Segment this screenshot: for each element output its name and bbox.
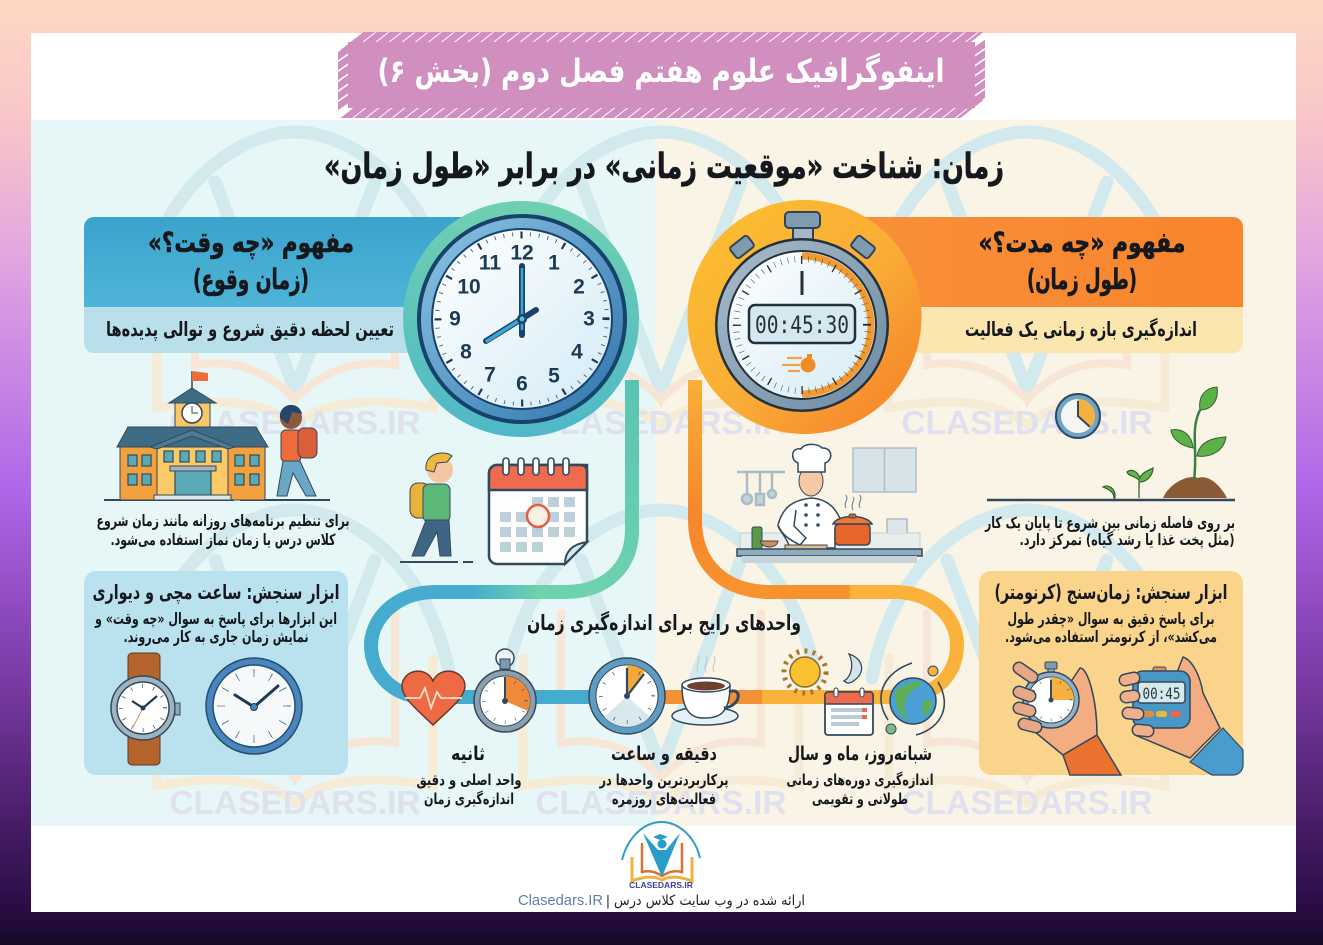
watermark text: CLASEDARS.IR: [901, 785, 1153, 822]
icon: boy walking: [400, 453, 473, 562]
icon: wall clock main: [403, 201, 639, 437]
icon: wall clock main: 5: [548, 364, 560, 388]
title banner: اینفوگرافیک علوم هفتم فصل دوم (بخش ۶): [378, 52, 944, 90]
icon: wall clock: [206, 658, 302, 754]
icon: growing plant: [987, 387, 1235, 500]
icon: small calendar: [825, 688, 873, 735]
panel: measuring tool stopwatch: برای پاسخ دقیق به سوال «چقدر طول: [1008, 610, 1214, 629]
unit: minute and hour: فعالیت‌های روزمره: [612, 790, 716, 808]
icon: wall clock main: 7: [484, 364, 496, 386]
icon: sun: [784, 651, 826, 693]
panel: measuring tool stopwatch: ابزار سنجش: زمان‌سنج (کرنومتر): [994, 580, 1228, 604]
unit: day month year: طولانی و تقویمی: [812, 790, 908, 808]
watermark text: [169, 405, 1153, 822]
timeline path: right orange-yellow: [655, 380, 957, 697]
panel: duration concept: (طول زمان): [1027, 263, 1137, 296]
watermark logos: [140, 132, 1182, 803]
unit: day month year: شبانه‌روز، ماه و سال: [788, 743, 932, 765]
footer logo: CLASEDARS.IR: [629, 880, 693, 890]
text: duration example: [984, 514, 1235, 550]
unit: seconds: واحد اصلی و دقیق: [416, 771, 522, 789]
panel: duration concept: [850, 217, 1243, 353]
unit: minute and hour: پرکاربردترین واحدها در: [599, 771, 728, 790]
watermark text: CLASEDARS.IR: [901, 405, 1153, 442]
icon: wall clock main: 8: [460, 340, 472, 364]
icon: minute clock: [589, 658, 665, 734]
icon: earth with orbit: [881, 663, 944, 735]
watermark text: CLASEDARS.IR: [535, 405, 787, 442]
icon: wall clock main: 12: [510, 242, 534, 264]
footer credit text: ارائه شده در وب سایت کلاس درس: [614, 893, 805, 909]
icon: stopwatch main: [688, 200, 922, 434]
icon: hand with digital timer: 00:45: [1142, 684, 1180, 703]
icon: wall clock main: 2: [573, 276, 585, 298]
unit: day month year: اندازه‌گیری دوره‌های زمانی: [786, 771, 934, 789]
unit: day month year: [786, 743, 934, 808]
unit: seconds: اندازه‌گیری زمان: [424, 790, 514, 808]
icon: wall clock main: 10: [457, 276, 481, 298]
panel: when concept: [84, 217, 480, 353]
icon: wall clock main: 9: [449, 308, 461, 330]
panel: measuring tool clocks: ابزار سنجش: ساعت مچی و دیواری: [92, 580, 340, 605]
panel: when concept: تعیین لحظه دقیق شروع و توالی پدیده‌ها: [106, 317, 394, 342]
panel: measuring tool stopwatch: [979, 571, 1243, 775]
panel: measuring tool clocks: نمایش زمان جاری به کار می‌روند.: [124, 628, 308, 646]
icon: wall clock main: 1: [548, 252, 560, 274]
icon: wall clock main: 6: [516, 372, 528, 396]
panel: measuring tool clocks: [84, 571, 348, 775]
icon: coffee cup: [672, 656, 738, 725]
infographic background right: [655, 120, 1296, 826]
icon: stopwatch main: 00:45:30: [755, 311, 849, 339]
icon: heart: [402, 671, 465, 725]
icon: hand with digital timer: [1125, 657, 1243, 775]
watermark text: CLASEDARS.IR: [535, 785, 787, 822]
text: school example: برای تنظیم برنامه‌های روزانه مانند زمان شروع: [96, 512, 350, 530]
text: school example: [96, 512, 350, 549]
text: school example: کلاس درس یا زمان نماز استفاده می‌شود.: [110, 531, 336, 549]
icon: hand with stopwatch: [1019, 662, 1121, 775]
title banner: [347, 41, 976, 109]
icon: small clock right: [1056, 394, 1100, 438]
icon: chef cooking: [737, 444, 922, 563]
footer logo: [622, 822, 700, 890]
icon: moon: [844, 654, 862, 683]
icon: wall clock main: 3: [583, 308, 595, 330]
icon: wristwatch: [111, 653, 180, 765]
unit: minute and hour: [599, 743, 728, 808]
unit: minute and hour: دقیقه و ساعت: [611, 743, 717, 765]
panel: when concept: مفهوم «چه وقت؟»: [148, 226, 354, 259]
panel: measuring tool stopwatch: می‌کشد»، از کرنومتر استفاده می‌شود.: [1005, 628, 1217, 646]
panel: duration concept: اندازه‌گیری بازه زمانی یک فعالیت: [965, 317, 1197, 341]
icon: wall clock main: 4: [571, 340, 583, 364]
footer credit text: [518, 893, 805, 909]
main heading: زمان: شناخت «موقعیت زمانی» در برابر «طول زمان»: [324, 147, 1004, 187]
unit: seconds: ثانیه: [451, 743, 485, 765]
icon: small stopwatch: [474, 649, 536, 732]
watermark text: CLASEDARS.IR: [169, 405, 421, 442]
panel: duration concept: مفهوم «چه مدت؟»: [978, 226, 1186, 259]
watermark text: CLASEDARS.IR: [169, 785, 421, 822]
infographic background left: [31, 120, 655, 826]
unit: seconds: [416, 743, 522, 808]
timeline path: left teal-blue: [371, 380, 655, 697]
panel: measuring tool clocks: این ابزارها برای پاسخ به سوال «چه وقت» و: [94, 610, 337, 629]
footer credit text: |: [606, 894, 610, 909]
icon: wall clock main: 11: [479, 252, 501, 274]
panel: when concept: (زمان وقوع): [193, 263, 309, 296]
text: duration example: (مثل پخت غذا یا رشد گیاه) تمرکز دارد.: [1020, 530, 1234, 550]
icon: calendar: [489, 458, 587, 564]
icon: school with student: [104, 371, 330, 500]
footer credit text: Clasedars.IR: [518, 893, 603, 909]
units heading: واحدهای رایج برای اندازه‌گیری زمان: [527, 610, 801, 635]
